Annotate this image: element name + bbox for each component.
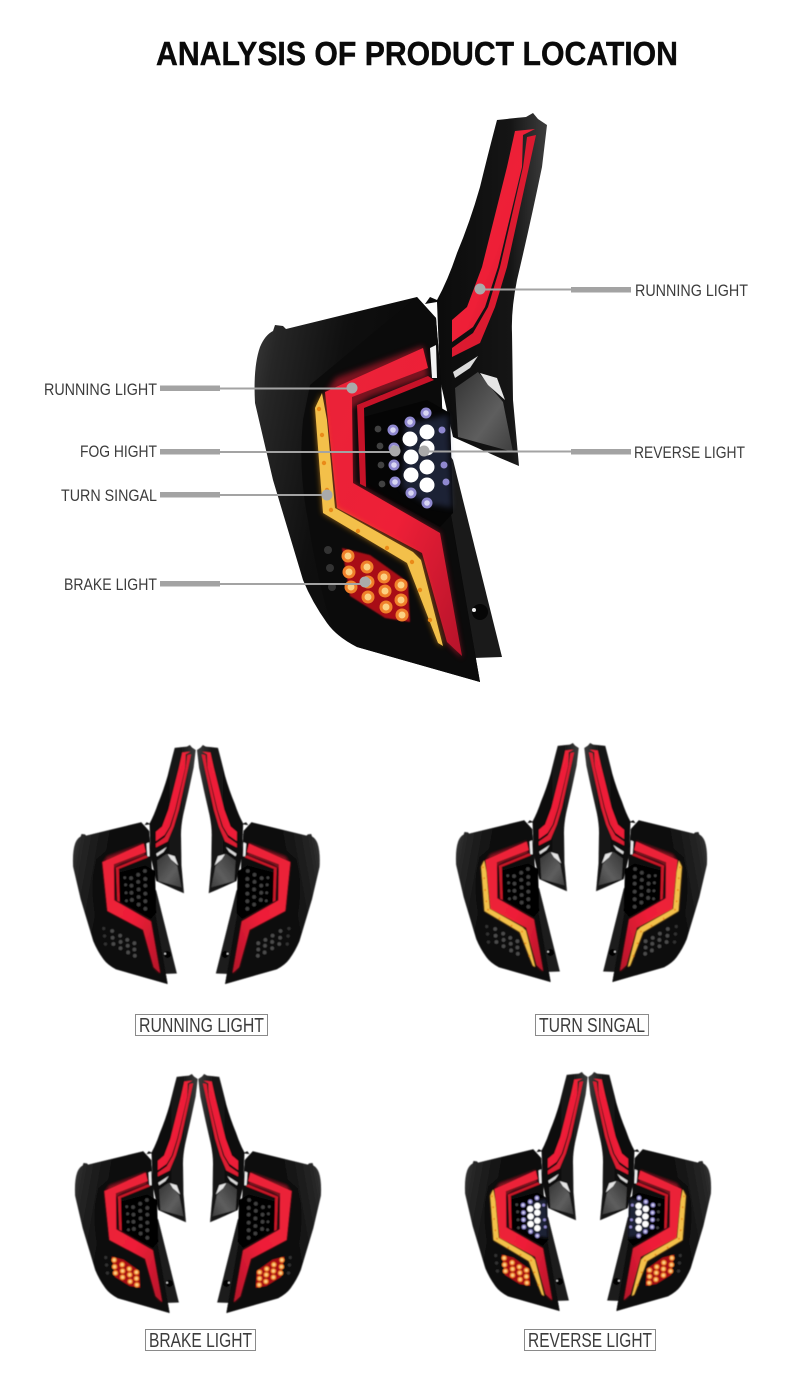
callout: turn singal: TURN SINGAL (61, 486, 157, 505)
callout: running light, left: RUNNING LIGHT (44, 380, 157, 399)
callout: fog hight: FOG HIGHT (80, 442, 157, 461)
caption: running light: RUNNING LIGHT (139, 1015, 264, 1037)
callout: fog hight (80, 442, 400, 461)
title: ANALYSIS OF PRODUCT LOCATION (156, 35, 678, 72)
main tail light product image (255, 113, 547, 682)
callout: running light, upper right (474, 281, 748, 300)
caption: turn singal: TURN SINGAL (539, 1015, 645, 1037)
left lamp, turn signal (456, 743, 579, 982)
right lamp, running light (197, 745, 320, 984)
callout: running light, upper right: RUNNING LIGHT (635, 281, 748, 300)
callout: reverse light (418, 443, 745, 462)
caption: brake light: BRAKE LIGHT (149, 1330, 252, 1352)
panel: running light pair (73, 745, 320, 984)
right lamp, reverse light (588, 1072, 711, 1311)
panel: reverse light pair (465, 1072, 711, 1311)
panel: turn signal pair (456, 743, 707, 982)
callout: turn singal (61, 486, 332, 505)
callout: running light, left (44, 380, 358, 399)
callout: brake light: BRAKE LIGHT (64, 575, 157, 594)
right lamp, brake light (198, 1074, 321, 1313)
caption: reverse light: REVERSE LIGHT (528, 1330, 652, 1352)
left lamp, brake light (75, 1074, 198, 1313)
left lamp, reverse light (465, 1072, 588, 1311)
right lamp, turn signal (584, 743, 707, 982)
left lamp, running light (73, 745, 196, 984)
panel: brake light pair (75, 1074, 321, 1313)
callout: brake light (64, 575, 370, 594)
callout: reverse light: REVERSE LIGHT (634, 443, 745, 462)
